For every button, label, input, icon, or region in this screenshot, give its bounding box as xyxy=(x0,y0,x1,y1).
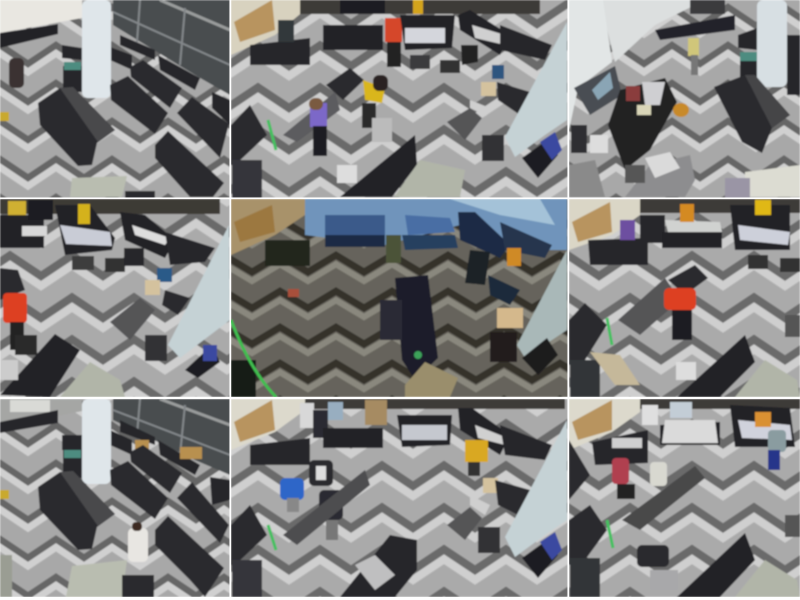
panel: bottom right camera view xyxy=(569,399,800,597)
panel: bottom centre camera view xyxy=(231,399,568,597)
panel: centre camera view xyxy=(231,199,568,397)
panel: top left camera view xyxy=(0,0,230,198)
panel: middle left camera view xyxy=(0,199,230,397)
panel: middle right camera view xyxy=(569,199,800,397)
panel: bottom left camera view xyxy=(0,399,230,597)
panel: top centre camera view xyxy=(231,0,568,198)
panel: top right camera view xyxy=(569,0,800,198)
